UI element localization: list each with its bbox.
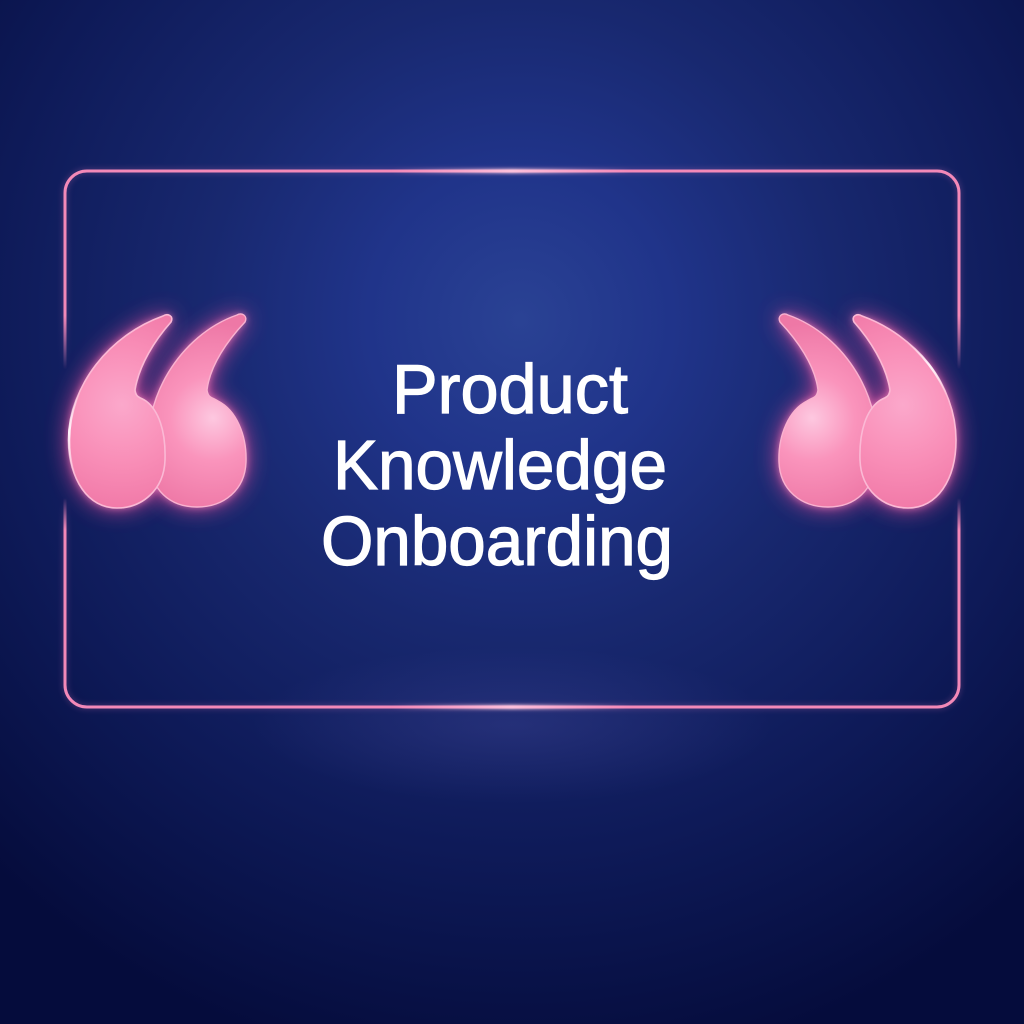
panel: glowing rounded frame	[65, 169, 959, 709]
icon: left opening quotation mark	[69, 314, 246, 508]
title: Product	[392, 350, 628, 428]
title: Knowledge	[333, 426, 667, 504]
title	[321, 350, 673, 580]
icon: right closing quotation mark	[779, 314, 956, 508]
title: Onboarding	[321, 502, 673, 580]
